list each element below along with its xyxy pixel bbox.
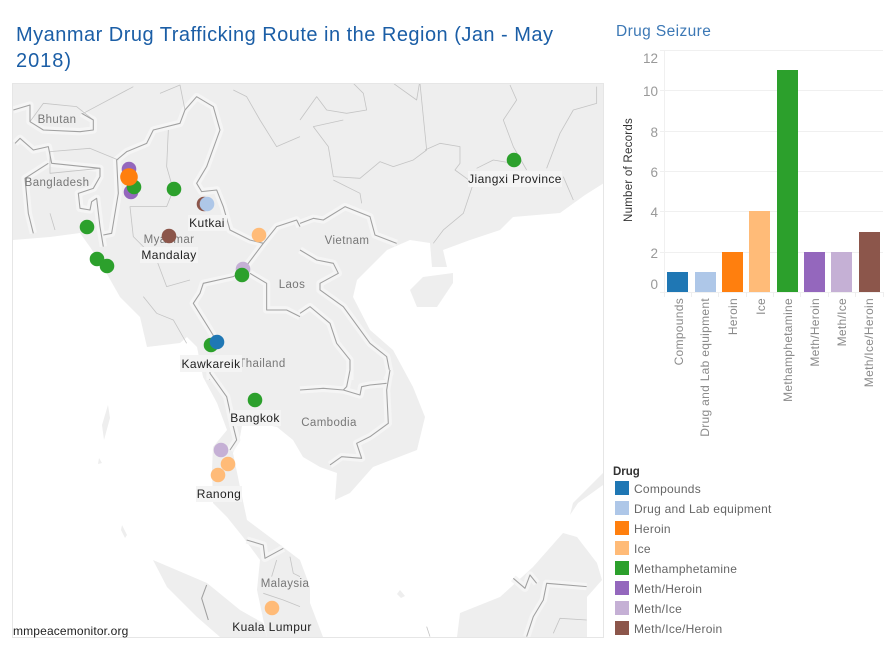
- y axis labels: 4: [650, 205, 658, 220]
- title: [16, 24, 553, 72]
- country labels: Myanmar: [144, 234, 194, 246]
- city labels: Mandalay: [141, 248, 197, 262]
- city labels: Jiangxi Province: [468, 172, 562, 186]
- country labels: Bhutan: [38, 114, 76, 126]
- map borders: north-east section: [300, 80, 597, 380]
- legend title: Drug: [613, 466, 640, 478]
- legend items: Drug and Lab equipment: [634, 502, 772, 516]
- panel: route map: [12, 80, 604, 638]
- title: 2018): [16, 50, 71, 72]
- y axis labels: 6: [650, 165, 658, 180]
- x axis labels: Meth/Ice: [835, 298, 849, 346]
- x axis labels: Methamphetamine: [781, 298, 795, 402]
- legend: [613, 466, 772, 636]
- x axis labels: Meth/Heroin: [808, 298, 822, 367]
- city labels: Kawkareik: [182, 357, 241, 371]
- title: Myanmar Drug Trafficking Route in the Region (Jan - May: [16, 24, 553, 46]
- y axis labels: 10: [643, 84, 658, 99]
- x axis labels: Drug and Lab equipment: [698, 298, 712, 437]
- x axis labels: [672, 298, 876, 437]
- chart heading: Drug Seizure: [616, 23, 711, 40]
- map borders: south-east section: [300, 370, 587, 637]
- y axis labels: 0: [650, 277, 658, 292]
- y axis labels: 8: [650, 125, 658, 140]
- map borders: north-west section: [13, 85, 300, 380]
- x axis labels: Meth/Ice/Heroin: [862, 298, 876, 387]
- map frame: [12, 84, 604, 638]
- bars: [667, 70, 880, 292]
- y axis labels: [643, 51, 658, 292]
- y axis title: Number of Records: [623, 118, 635, 222]
- legend items: Ice: [634, 542, 651, 556]
- country labels: Laos: [279, 279, 305, 291]
- legend items: [615, 481, 772, 636]
- legend items: Meth/Ice: [634, 602, 682, 616]
- legend items: Methamphetamine: [634, 562, 737, 576]
- map borders: south-west section: [202, 373, 300, 620]
- map land masses: [13, 84, 604, 637]
- y axis labels: 12: [643, 51, 658, 66]
- country labels: Bangladesh: [25, 177, 89, 189]
- seizure location points: [80, 153, 521, 615]
- x axis labels: Compounds: [672, 298, 686, 365]
- legend items: Meth/Heroin: [634, 582, 702, 596]
- country labels: Vietnam: [325, 235, 369, 247]
- bar chart: [623, 50, 884, 437]
- country labels: [25, 114, 369, 590]
- legend items: Compounds: [634, 482, 701, 496]
- legend items: Meth/Ice/Heroin: [634, 622, 722, 636]
- x axis labels: Heroin: [726, 298, 740, 335]
- x axis labels: Ice: [754, 298, 768, 315]
- country labels: Malaysia: [261, 578, 309, 590]
- legend items: Heroin: [634, 522, 671, 536]
- city labels: Bangkok: [230, 411, 280, 425]
- city labels: [140, 171, 562, 634]
- country labels: Cambodia: [301, 417, 357, 429]
- city labels: Ranong: [197, 487, 241, 501]
- y axis labels: 2: [650, 246, 658, 261]
- city labels: Kutkai: [189, 216, 225, 230]
- city labels: Kuala Lumpur: [232, 620, 312, 634]
- country labels: Thailand: [238, 358, 286, 370]
- watermark: mmpeacemonitor.org: [13, 624, 128, 638]
